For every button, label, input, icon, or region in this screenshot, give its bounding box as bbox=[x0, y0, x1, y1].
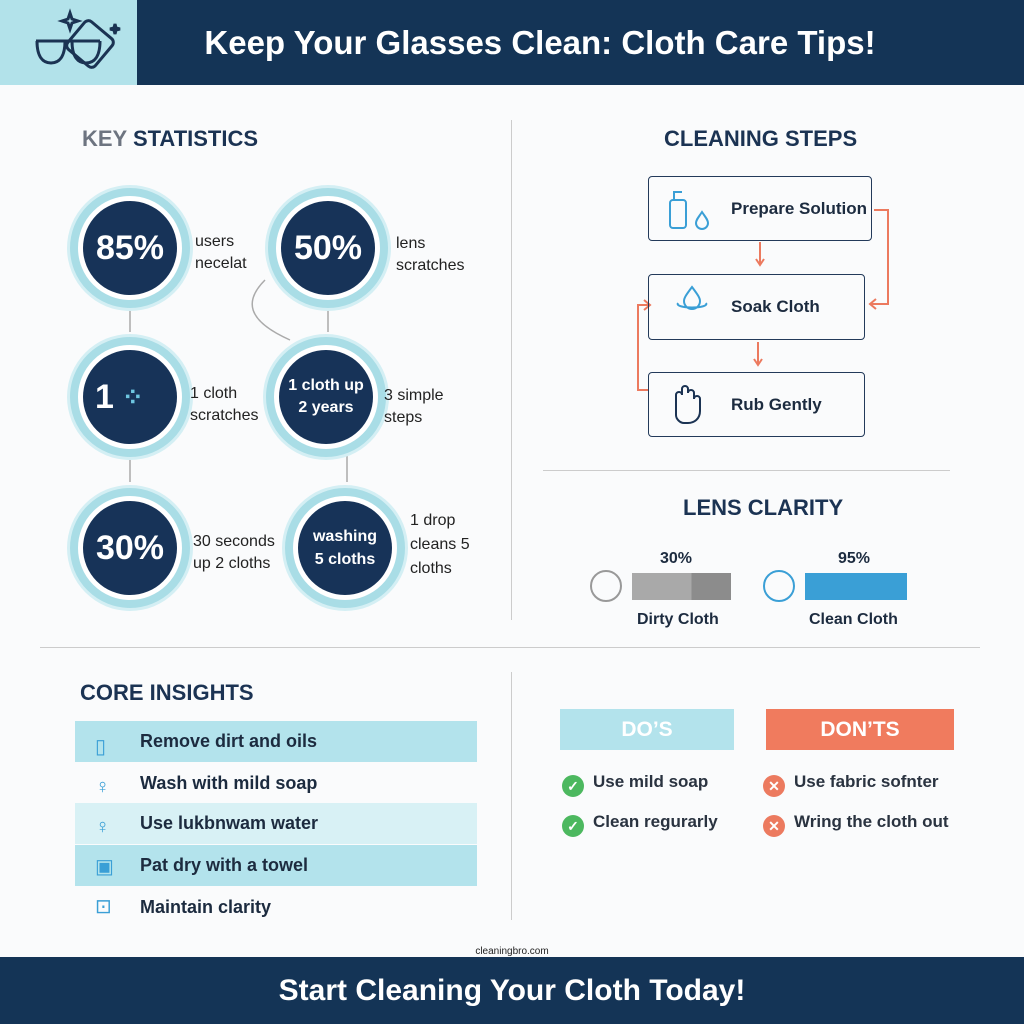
step 2: Soak Cloth bbox=[731, 297, 820, 316]
chart: clarity bars: 95% bbox=[838, 550, 870, 567]
text: necelat bbox=[195, 255, 247, 272]
list: insights: ⊡ bbox=[95, 896, 112, 918]
text: Wring the cloth out bbox=[794, 812, 949, 831]
stat 50% bbox=[268, 188, 388, 308]
list: insights: Use lukbnwam water bbox=[140, 813, 318, 833]
step 3: Rub Gently bbox=[731, 394, 822, 414]
text: cloths bbox=[410, 560, 452, 577]
panel: donts: DON’TS bbox=[820, 718, 900, 741]
list: insights: ▯ bbox=[95, 736, 106, 758]
text: ✓ bbox=[567, 778, 579, 794]
stat washing: 5 cloths bbox=[315, 551, 375, 568]
list: insights: Maintain clarity bbox=[140, 897, 271, 917]
flowchart bbox=[637, 176, 889, 437]
footer: Start Cleaning Your Cloth Today! bbox=[279, 974, 745, 1006]
heading: core insights: CORE INSIGHTS bbox=[80, 680, 254, 705]
stat 85%: 85% bbox=[96, 228, 164, 266]
text: scratches bbox=[396, 257, 464, 274]
chart: clarity bars bbox=[590, 550, 907, 628]
text: up 2 cloths bbox=[193, 555, 270, 572]
list: insights bbox=[75, 721, 477, 918]
text: 1 cloth bbox=[190, 385, 237, 402]
title: Keep Your Glasses Clean: Cloth Care Tips! bbox=[204, 24, 876, 60]
text: ✓ bbox=[567, 818, 579, 834]
text: ✕ bbox=[768, 818, 780, 834]
step 1: Prepare Solution bbox=[731, 198, 867, 218]
stat 1 cloth: 1 cloth up bbox=[288, 377, 364, 394]
source: cleaningbro.com bbox=[475, 946, 549, 957]
heading: lens clarity: LENS CLARITY bbox=[683, 495, 843, 520]
stat 30%: 30% bbox=[96, 528, 164, 566]
text: users bbox=[195, 233, 234, 250]
list: insights: ♀ bbox=[95, 776, 110, 798]
panel: stats bbox=[129, 280, 348, 482]
stat 85% bbox=[70, 188, 190, 308]
stat 1 cloth: 2 years bbox=[298, 399, 354, 416]
step 1 bbox=[648, 176, 872, 241]
list: insights: ▣ bbox=[95, 856, 114, 878]
list: insights: Wash with mild soap bbox=[140, 773, 317, 793]
panel: dos: DO’S bbox=[621, 718, 673, 741]
stat 1: ⁘ bbox=[122, 382, 144, 412]
stat 1 cloth bbox=[266, 337, 386, 457]
heading: key statistics: KEY STATISTICS bbox=[82, 126, 258, 151]
panel: dos bbox=[560, 709, 734, 750]
footer bbox=[0, 957, 1024, 1024]
stat 30% bbox=[70, 488, 190, 608]
list: insights: Remove dirt and oils bbox=[140, 731, 317, 751]
stat washing bbox=[285, 488, 405, 608]
text: steps bbox=[384, 409, 422, 426]
text: 3 simple bbox=[384, 387, 444, 404]
step 2 bbox=[648, 274, 865, 340]
chart: clarity bars: 30% bbox=[660, 550, 692, 567]
stat 1: 1 bbox=[95, 378, 114, 416]
panel: donts bbox=[766, 709, 954, 750]
divider bbox=[511, 120, 512, 620]
text: Use mild soap bbox=[593, 772, 708, 791]
text: 30 seconds bbox=[193, 533, 275, 550]
text: lens bbox=[396, 235, 425, 252]
heading: cleaning steps: CLEANING STEPS bbox=[664, 126, 857, 151]
text: 1 drop bbox=[410, 512, 455, 529]
text: Clean regurarly bbox=[593, 812, 718, 831]
stat washing: washing bbox=[313, 528, 377, 545]
icon: glasses bbox=[0, 0, 137, 85]
header bbox=[0, 0, 1024, 85]
list: insights: ♀ bbox=[95, 816, 110, 838]
stat 1 bbox=[70, 337, 190, 457]
chart: clarity bars: Clean Cloth bbox=[809, 611, 898, 628]
text: ✕ bbox=[768, 778, 780, 794]
chart: clarity bars: Dirty Cloth bbox=[637, 611, 719, 628]
list: insights: Pat dry with a towel bbox=[140, 855, 308, 875]
step 3 bbox=[648, 372, 865, 437]
stat 50%: 50% bbox=[294, 228, 362, 266]
text: Use fabric sofnter bbox=[794, 772, 939, 791]
text: scratches bbox=[190, 407, 258, 424]
text: cleans 5 bbox=[410, 536, 470, 553]
